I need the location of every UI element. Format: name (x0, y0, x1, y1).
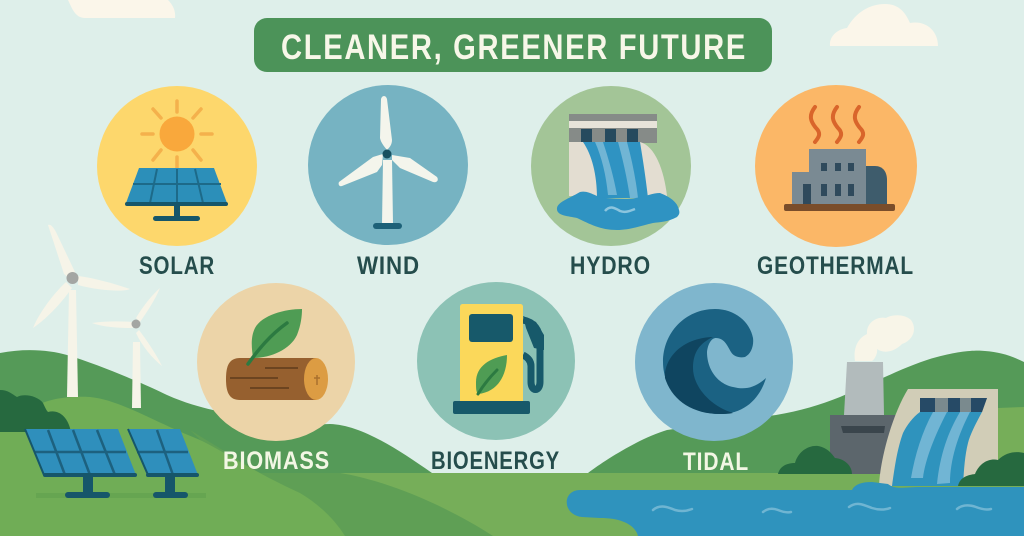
label: hydro: HYDRO (570, 252, 651, 280)
left wind turbines (33, 225, 162, 408)
icon: log with leaf (226, 309, 328, 400)
landscape background (0, 350, 1024, 536)
icon: solar panel (125, 168, 228, 221)
icon: wind turbine (339, 96, 438, 229)
panel: geothermal (755, 85, 917, 280)
panel: biomass (197, 283, 355, 475)
bush: far right (958, 452, 1024, 486)
cloud: top left (68, 0, 175, 18)
panel: tidal (635, 283, 793, 476)
label: biomass: BIOMASS (223, 447, 330, 475)
panel: solar (97, 86, 257, 280)
label: solar: SOLAR (139, 252, 215, 280)
water: lake (567, 482, 1024, 536)
panel: bioenergy (417, 282, 575, 475)
icon: steam (811, 107, 863, 142)
label: bioenergy: BIOENERGY (431, 447, 560, 475)
ground shadow (36, 493, 206, 498)
icon: fuel pump (453, 304, 544, 414)
smoke (855, 315, 914, 361)
panel: wind (308, 85, 468, 280)
label: geothermal: GEOTHERMAL (757, 252, 914, 280)
icon: wave (663, 309, 766, 414)
icon: geothermal plant (784, 149, 895, 211)
title banner (254, 18, 772, 72)
factory with chimney (830, 315, 914, 474)
label: tidal: TIDAL (683, 448, 749, 476)
small solar panel (128, 429, 198, 498)
icon: sun (142, 101, 212, 168)
bush: left (0, 390, 71, 432)
hydro dam: right (879, 389, 998, 486)
icon: dam (557, 114, 679, 230)
left solar panels (25, 429, 198, 498)
panel: hydro (531, 86, 691, 280)
bush: centre right (778, 446, 852, 474)
label: wind: WIND (357, 252, 420, 280)
title banner: CLEANER, GREENER FUTURE (281, 28, 747, 67)
large solar panel (25, 429, 136, 498)
cloud: top right (830, 4, 938, 46)
